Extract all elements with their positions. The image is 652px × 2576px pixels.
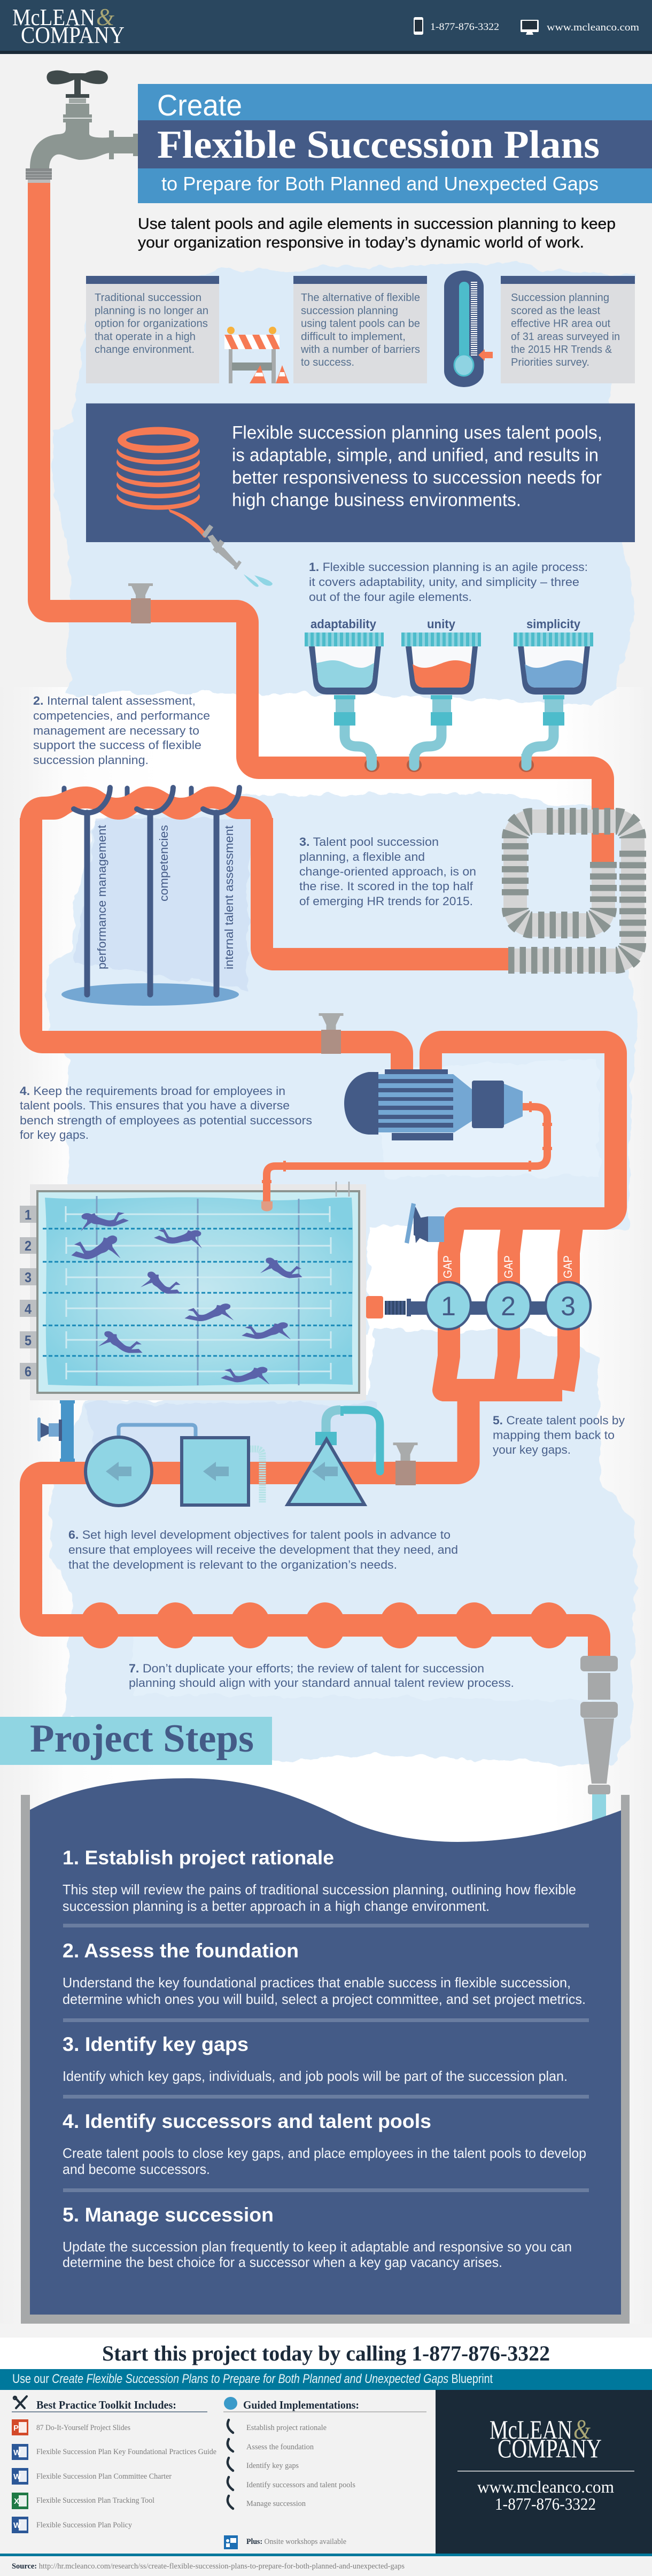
pipe bulges xyxy=(80,1602,569,1648)
water stream into tank xyxy=(592,1794,606,1826)
step 4 xyxy=(63,2110,586,2177)
step 4: Create talent pools to close key gaps, and place employees in the talent pools to develop xyxy=(63,2145,586,2161)
step 3 text xyxy=(299,835,476,908)
toolkit item: charter: Flexible Succession Plan Committee Charter xyxy=(36,2472,172,2481)
panel: traditional succession planning: Traditional succession xyxy=(95,291,201,304)
coil hose xyxy=(508,821,633,960)
panel: alternative flexible planning: The alternative of flexible xyxy=(301,291,420,304)
title block: Create xyxy=(157,88,242,122)
toolkit item: charter xyxy=(12,2468,172,2485)
icon: motor pump xyxy=(344,1069,523,1140)
step 5 text: your key gaps. xyxy=(493,1443,571,1456)
call to action: Start this project today by calling 1-877-876-3322 xyxy=(102,2341,550,2365)
panel: flexible succession definition: is adaptable, simple, and unified, and results in xyxy=(232,445,599,465)
step 2 text: competencies, and performance xyxy=(33,709,210,722)
rod labels: performance management xyxy=(95,825,108,969)
panel: HR trends survey xyxy=(501,276,635,383)
lane number tabs: 2 xyxy=(25,1238,32,1254)
subtitle: your organization responsive in today’s dynamic world of work. xyxy=(138,234,584,251)
step 5 text xyxy=(493,1414,625,1456)
valve on pipe 1 xyxy=(128,583,153,623)
pump shapes with arrows xyxy=(86,1437,364,1506)
step 5 text: 5. Create talent pools by xyxy=(493,1414,625,1427)
panel: alternative flexible planning: difficult to implement, xyxy=(301,330,406,343)
plus: onsite workshops xyxy=(224,2535,346,2549)
step 5 text: mapping them back to xyxy=(493,1429,615,1441)
step 2 text: management are necessary to xyxy=(33,724,199,737)
icon: faucet xyxy=(26,71,138,183)
logo: McLEAN xyxy=(12,4,95,30)
blueprint bar xyxy=(0,2369,652,2390)
subtitle: Use talent pools and agile elements in succession planning to keep xyxy=(138,215,616,233)
panel: traditional succession planning: option for organizations xyxy=(95,318,208,329)
step 5: Update the succession plan frequently to keep it adaptable and responsive so you can xyxy=(63,2239,572,2255)
lane number tabs xyxy=(20,1206,36,1379)
step 4: and become successors. xyxy=(63,2161,210,2177)
valve on pipe 3 xyxy=(393,1443,418,1485)
step 7 text xyxy=(129,1662,514,1690)
panel: HR trends survey: scored as the least xyxy=(511,305,600,317)
blue pipe and sprinkler xyxy=(37,1400,75,1462)
blueprint bar: Use our Create Flexible Succession Plans to Prepare for Both Planned and Unexpected Gaps Blueprint xyxy=(12,2372,493,2386)
step 1: 1. Establish project rationale xyxy=(63,1847,334,1869)
gap labels: GAP xyxy=(561,1255,575,1278)
lane number tabs: 5 xyxy=(25,1332,32,1348)
step 1: succession planning is a better approach in a high change environment. xyxy=(63,1898,490,1914)
gap circles and connector: 1 xyxy=(441,1291,456,1321)
rod labels: competencies xyxy=(157,825,170,901)
toolkit item: charter: W xyxy=(13,2472,21,2481)
cup: unity xyxy=(401,633,481,768)
valve on pipe 2 xyxy=(319,1013,343,1054)
cup: adaptability xyxy=(305,633,384,768)
lane number tabs: 3 xyxy=(25,1269,32,1285)
panel: HR trends survey: the 2015 HR Trends & xyxy=(511,343,612,356)
logo: & xyxy=(96,3,114,30)
step 4 text: talent pools. This ensures that you have a diverse xyxy=(20,1099,290,1112)
gap labels: GAP xyxy=(441,1255,454,1278)
pipe: wavy top section xyxy=(20,786,273,826)
toolkit item: tracking tool xyxy=(12,2493,154,2509)
step 3 text: change-oriented approach, is on xyxy=(299,865,476,878)
toolkit heading: Best Practice Toolkit Includes: xyxy=(36,2398,176,2411)
final nozzle xyxy=(580,1656,618,1794)
step 5 xyxy=(63,2204,572,2270)
step 7 text: 7. Don’t duplicate your efforts; the review of talent for succession xyxy=(129,1662,484,1675)
step 1 text: 1. Flexible succession planning is an agile process: xyxy=(309,560,588,574)
step 1 text: out of the four agile elements. xyxy=(309,590,472,604)
panel: HR trends survey: Succession planning xyxy=(511,291,609,304)
gap circles and connector: 3 xyxy=(561,1291,576,1321)
step 3 text: of emerging HR trends for 2015. xyxy=(299,894,473,908)
toolkit item: tracking tool: Flexible Succession Plan Tracking Tool xyxy=(36,2496,154,2505)
toolkit item: guide xyxy=(12,2444,216,2460)
footer logo panel: COMPANY xyxy=(498,2433,602,2463)
lane ropes xyxy=(43,1229,353,1356)
toolkit item: guide: Flexible Succession Plan Key Foundational Practices Guide xyxy=(36,2448,216,2456)
panel: flexible succession definition: high change business environments. xyxy=(232,490,521,510)
header bar xyxy=(0,0,652,54)
toolkit item: tracking tool: X xyxy=(14,2497,19,2506)
lane number tabs: 1 xyxy=(25,1207,32,1223)
logo: COMPANY xyxy=(21,22,125,48)
icon: monitor xyxy=(521,20,539,35)
pool ladder xyxy=(336,1182,349,1197)
toolkit item: guide: W xyxy=(13,2448,21,2457)
pipe: gap legs xyxy=(444,1218,573,1390)
toolkit item: slides: 87 Do-It-Yourself Project Slides xyxy=(36,2424,130,2432)
title block: to Prepare for Both Planned and Unexpected Gaps xyxy=(161,173,599,195)
agile element labels: simplicity xyxy=(526,617,580,631)
footer logo panel: McLEAN xyxy=(490,2415,572,2444)
icon: phone xyxy=(414,17,423,35)
icon: water drops xyxy=(244,574,273,587)
panel: traditional succession planning xyxy=(86,276,219,383)
step 4 text: bench strength of employees as potential successors xyxy=(20,1114,312,1127)
footer logo panel xyxy=(436,2390,652,2554)
cup: simplicity xyxy=(514,633,593,768)
step 6 text: that the development is relevant to the organization’s needs. xyxy=(68,1558,397,1571)
panel: traditional succession planning: that operate in a high xyxy=(95,330,196,343)
rod labels xyxy=(95,825,236,969)
step 4: 4. Identify successors and talent pools xyxy=(63,2110,431,2132)
website: www.mcleanco.com xyxy=(547,22,639,33)
step 6 text: ensure that employees will receive the development that they need, and xyxy=(68,1543,458,1556)
lane number tabs: 6 xyxy=(25,1363,32,1379)
panel: flexible succession definition: Flexible succession planning uses talent pools, xyxy=(232,422,602,443)
plus: onsite workshops: Plus: Onsite workshops available xyxy=(246,2538,346,2546)
title block: Flexible Succession Plans xyxy=(157,123,600,167)
pipe: left vertical and lower run xyxy=(31,818,402,1072)
logo xyxy=(12,3,125,48)
step 4 text xyxy=(20,1084,312,1142)
step 3: Identify which key gaps, individuals, and job pools will be part of the succession plan. xyxy=(63,2068,568,2084)
panel: HR trends survey: Priorities survey. xyxy=(511,356,589,368)
step 5: 5. Manage succession xyxy=(63,2204,274,2226)
step 1 text xyxy=(309,560,588,604)
lane markers xyxy=(66,1206,331,1379)
icon: coiled hose with nozzle xyxy=(117,427,273,587)
step 7 text: planning should align with your standard annual talent review process. xyxy=(129,1676,514,1690)
step 3 text: planning, a flexible and xyxy=(299,850,425,863)
toolkit item: slides xyxy=(12,2419,130,2435)
step 4 text: for key gaps. xyxy=(20,1128,89,1142)
gap circles and connector xyxy=(366,1282,591,1329)
panel: flexible succession definition: better responsiveness to succession needs for xyxy=(232,467,602,488)
icon: thermometer xyxy=(444,271,493,387)
panel: alternative flexible planning: succession planning xyxy=(301,305,398,317)
guided items with phone icons: Assess the foundation xyxy=(246,2443,314,2451)
watercolor darker accents xyxy=(75,818,599,1700)
pipe: manifold down and across to final run xyxy=(31,1395,599,1657)
panel: traditional succession planning: planning is no longer an xyxy=(95,305,208,317)
icon: globe xyxy=(224,2397,237,2410)
footer logo panel: 1-877-876-3322 xyxy=(495,2494,596,2513)
guided items with phone icons: Identify successors and talent pools xyxy=(246,2481,355,2489)
toolkit item: policy: Flexible Succession Plan Policy xyxy=(36,2521,132,2529)
step 6 text xyxy=(68,1528,458,1571)
step 6 text: 6. Set high level development objectives for talent pools in advance to xyxy=(68,1528,451,1541)
step 1: This step will review the pains of traditional succession planning, outlining how flexible xyxy=(63,1881,576,1898)
panel: alternative flexible planning: to success. xyxy=(301,356,354,368)
step 2 xyxy=(63,1940,586,2007)
panel: HR trends survey: of 31 areas surveyed in xyxy=(511,330,620,343)
title block xyxy=(138,84,652,203)
main pipe: faucet to coil xyxy=(39,183,603,909)
swimmers xyxy=(70,1212,305,1389)
toolkit item: policy: W xyxy=(13,2521,21,2530)
step 3: 3. Identify key gaps xyxy=(63,2033,249,2055)
step 2 text: succession planning. xyxy=(33,753,149,767)
gap labels xyxy=(441,1255,575,1278)
icon: tools xyxy=(13,2396,27,2408)
source line: Source: http://hr.mcleanco.com/research/ss/create-flexible-succession-plans-to-prepare-for-both-planned-and-unexpected-gaps xyxy=(12,2562,405,2571)
guided implementations heading: Guided Implementations: xyxy=(243,2398,359,2411)
step 2 text: 2. Internal talent assessment, xyxy=(33,694,196,707)
panel: alternative flexible planning: using talent pools can be xyxy=(301,318,420,329)
rod labels: internal talent assessment xyxy=(222,826,236,969)
small pipe: motor to pool inlet xyxy=(261,1101,552,1212)
guided items with phone icons: Manage succession xyxy=(246,2500,306,2508)
project steps tank xyxy=(21,1778,630,2324)
panel: HR trends survey: effective HR area out xyxy=(511,318,610,329)
panel: alternative flexible planning: with a number of barriers xyxy=(300,343,420,356)
step 2 text: support the success of flexible xyxy=(33,738,201,752)
step 3 text: 3. Talent pool succession xyxy=(299,835,439,849)
step 1 xyxy=(63,1847,576,1914)
guided items with phone icons xyxy=(228,2420,355,2509)
foundation pool ellipse xyxy=(61,983,239,1006)
drain holes on pipe xyxy=(364,754,534,772)
foundation rods with hooks xyxy=(74,788,239,994)
teal pipework xyxy=(119,1406,380,1502)
step 2 text xyxy=(33,694,210,767)
project steps heading: Project Steps xyxy=(30,1717,254,1761)
step 2: 2. Assess the foundation xyxy=(63,1940,299,1962)
step 4 text: 4. Keep the requirements broad for employees in xyxy=(20,1084,285,1098)
footer logo panel: & xyxy=(573,2415,591,2445)
footer teal strip xyxy=(0,2554,652,2556)
agile element labels: unity xyxy=(427,617,455,631)
step 5: determine the best choice for a successor when a key gap vacancy arises. xyxy=(63,2254,502,2270)
watercolor wash backgrounds xyxy=(48,263,639,1765)
phone number: 1-877-876-3322 xyxy=(430,21,499,33)
agile element labels: adaptability xyxy=(311,617,376,631)
icon: road barricade and cones xyxy=(224,327,289,383)
swimming pool xyxy=(30,1182,366,1400)
step 3 text: the rise. It scored in the top half xyxy=(299,880,474,893)
icon: sprinkler upper xyxy=(405,1203,444,1244)
rod back hooks xyxy=(64,788,191,797)
step 1 text: it covers adaptability, unity, and simplicity – three xyxy=(309,575,579,589)
gap circles and connector: 2 xyxy=(501,1291,516,1321)
panel: traditional succession planning: change environment. xyxy=(95,343,195,356)
pipe: motor to gap manifold xyxy=(431,1042,616,1218)
step 2: determine which ones you will build, select a project committee, and set project metrics. xyxy=(63,1991,586,2007)
step 2: Understand the key foundational practices that enable success in flexible succession, xyxy=(63,1975,571,1991)
gap labels: GAP xyxy=(502,1255,515,1278)
toolkit item: slides: P xyxy=(13,2424,19,2433)
lane number tabs: 4 xyxy=(25,1301,32,1317)
subtitle xyxy=(138,215,616,251)
footer logo panel: www.mcleanco.com xyxy=(477,2477,614,2496)
pipe: coil to wavy section xyxy=(262,818,508,959)
lane lines xyxy=(97,1196,299,1385)
agile element labels xyxy=(311,617,580,631)
guided items with phone icons: Identify key gaps xyxy=(246,2462,299,2470)
panel: flexible succession definition xyxy=(86,403,635,542)
step 3 xyxy=(63,2033,568,2084)
guided items with phone icons: Establish project rationale xyxy=(246,2424,327,2432)
footer panel xyxy=(0,2390,436,2554)
toolkit item: policy xyxy=(12,2517,132,2533)
panel: alternative flexible planning xyxy=(293,276,427,383)
